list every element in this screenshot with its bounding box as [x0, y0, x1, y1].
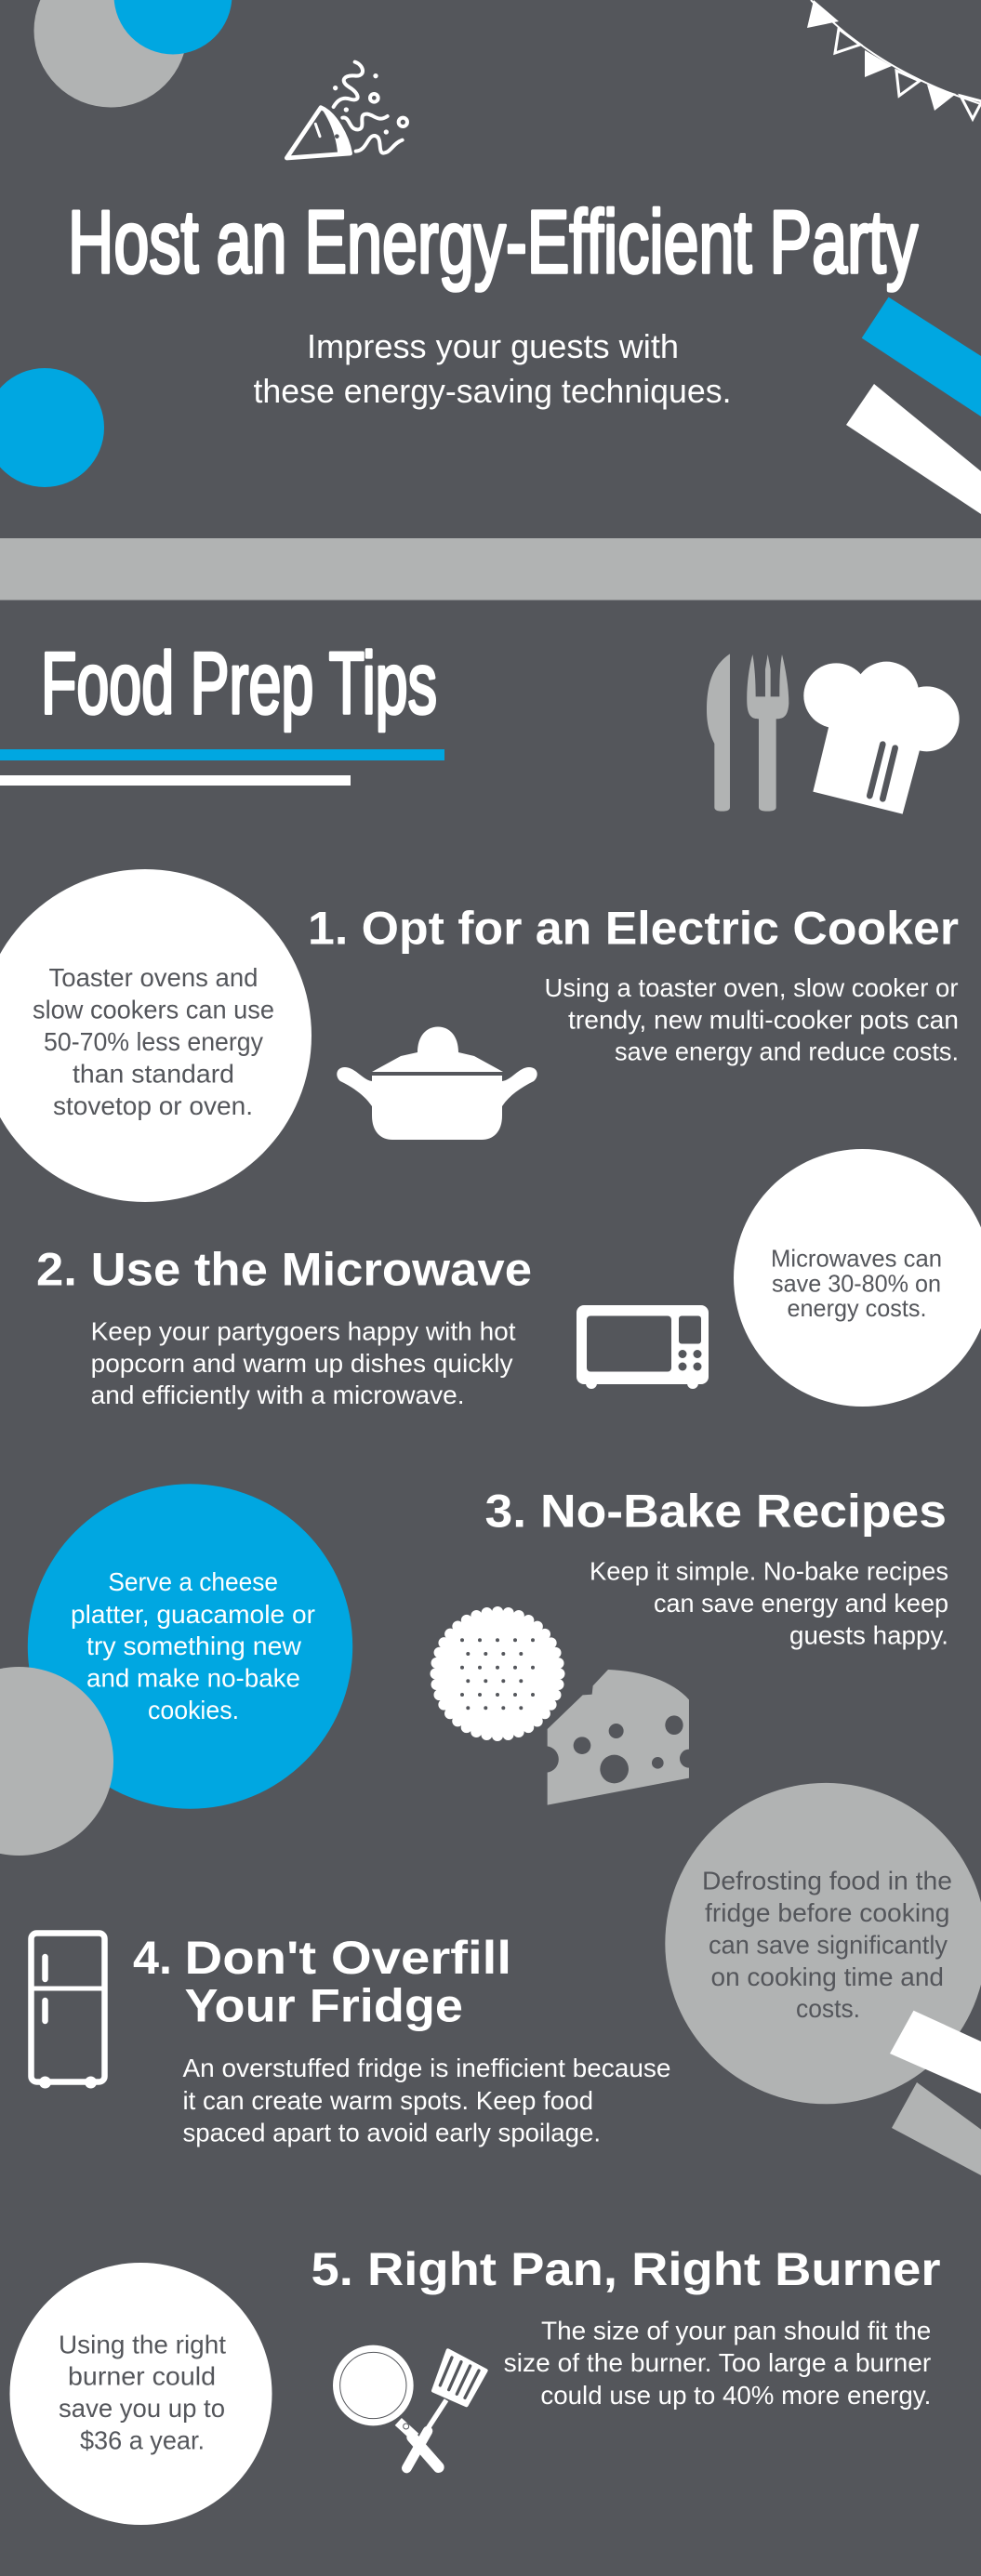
tip 5 text: size of the burner. Too large a burner [504, 2348, 931, 2377]
heading underline blue [0, 749, 444, 760]
tip 1 heading: 1. Opt for an Electric Cooker [308, 902, 959, 954]
callout circle 3: and make no-bake [86, 1664, 300, 1693]
tip 2 text: popcorn and warm up dishes quickly [91, 1349, 513, 1378]
decoration: white band lower [890, 2011, 981, 2094]
callout circle 2: Microwaves can [771, 1245, 942, 1273]
tip 2 text: Keep your partygoers happy with hot [91, 1316, 516, 1345]
subtitle: Impress your guests with [307, 327, 679, 365]
callout circle 4: Defrosting food in the [702, 1867, 952, 1895]
tip 3 heading: 3. No-Bake Recipes [485, 1485, 947, 1537]
tip 5 heading: 5. Right Pan, Right Burner [311, 2243, 941, 2295]
decoration: blue diagonal band [862, 297, 981, 416]
callout circle 4: on cooking time and [710, 1962, 944, 1991]
tip 1 text [545, 973, 959, 1065]
tip 4 text [182, 2054, 671, 2147]
callout circle 1: slow cookers can use [33, 995, 274, 1024]
callout circle 5 [9, 2263, 272, 2525]
tip 4 heading: Don't Overfill [184, 1932, 511, 1984]
callout circle 1: stovetop or oven. [53, 1091, 253, 1120]
tip 3 text [590, 1556, 948, 1649]
tip 1 text: Using a toaster oven, slow cooker or [545, 973, 958, 1002]
tip 4 heading [133, 1932, 511, 2032]
subtitle [253, 327, 731, 410]
callout circle 1: Toaster ovens and [48, 963, 259, 992]
heading underline white [0, 775, 351, 786]
section heading: Food Prep Tips: Food Prep Tips [41, 634, 437, 732]
tip 3 text: can save energy and keep [654, 1589, 948, 1618]
callout circle 4 [665, 1783, 981, 2104]
decoration: gray band lower [892, 2082, 981, 2175]
icon: microwave [577, 1305, 709, 1389]
tip 3 text: Keep it simple. No-bake recipes [590, 1556, 948, 1586]
tip 1 text: trendy, new multi-cooker pots can [568, 1006, 959, 1034]
icon: cracker [435, 1612, 560, 1736]
callout circle 2 [734, 1149, 981, 1407]
callout circle 2: save 30-80% on [772, 1270, 941, 1298]
icon: fridge [31, 1934, 105, 2088]
tip 4 text: spaced apart to avoid early spoilage. [182, 2118, 601, 2147]
icon: party popper [286, 62, 407, 158]
decoration: left blue circle [0, 368, 104, 487]
tip 3 text: guests happy. [789, 1621, 948, 1649]
tip 4 text: it can create warm spots. Keep food [182, 2086, 593, 2115]
callout circle 4: fridge before cooking [705, 1898, 950, 1927]
icon: pan and spatula [333, 2345, 486, 2468]
subtitle: these energy-saving techniques. [253, 372, 731, 410]
callout circle 3 [28, 1484, 352, 1809]
decoration: white diagonal band [846, 384, 981, 514]
tip 5 text: The size of your pan should fit the [541, 2317, 931, 2345]
callout circle 1 [0, 869, 312, 1202]
tip 4 heading: 4. [133, 1932, 172, 1984]
decoration: bunting [807, 0, 981, 119]
icon: pot [337, 1026, 537, 1140]
icon: chef hat [803, 662, 960, 814]
tip 4 text: An overstuffed fridge is inefficient because [182, 2054, 671, 2082]
callout circle 3: try something new [86, 1631, 302, 1660]
tip 5 text: could use up to 40% more energy. [540, 2381, 931, 2410]
callout circle 3: cookies. [148, 1696, 239, 1724]
callout circle 5: Using the right [59, 2330, 226, 2359]
tip 2 text [91, 1316, 516, 1409]
decoration: gray circle left [0, 1667, 113, 1856]
divider band [0, 538, 981, 601]
callout circle 4: costs. [796, 1994, 860, 2023]
callout circle 5: save you up to [59, 2394, 225, 2423]
callout circle 5: burner could [68, 2361, 216, 2391]
tip 4 heading: Your Fridge [184, 1980, 463, 2032]
callout circle 3: platter, guacamole or [71, 1600, 315, 1629]
tip 5 text [504, 2317, 931, 2410]
tip 2 text: and efficiently with a microwave. [91, 1380, 465, 1409]
tip 1 text: save energy and reduce costs. [615, 1037, 959, 1065]
tip 2 heading: 2. Use the Microwave [36, 1243, 532, 1295]
callout circle 5: $36 a year. [80, 2426, 205, 2454]
callout circle 1: 50-70% less energy [44, 1027, 263, 1056]
icon: cheese [548, 1670, 689, 1805]
callout circle 1: than standard [73, 1060, 234, 1088]
icon: knife and fork [707, 654, 789, 812]
callout circle 2: energy costs. [787, 1294, 926, 1322]
callout circle 3: Serve a cheese [108, 1567, 278, 1596]
callout circle 4: can save significantly [709, 1930, 948, 1959]
decoration: top-left circles [33, 0, 232, 108]
